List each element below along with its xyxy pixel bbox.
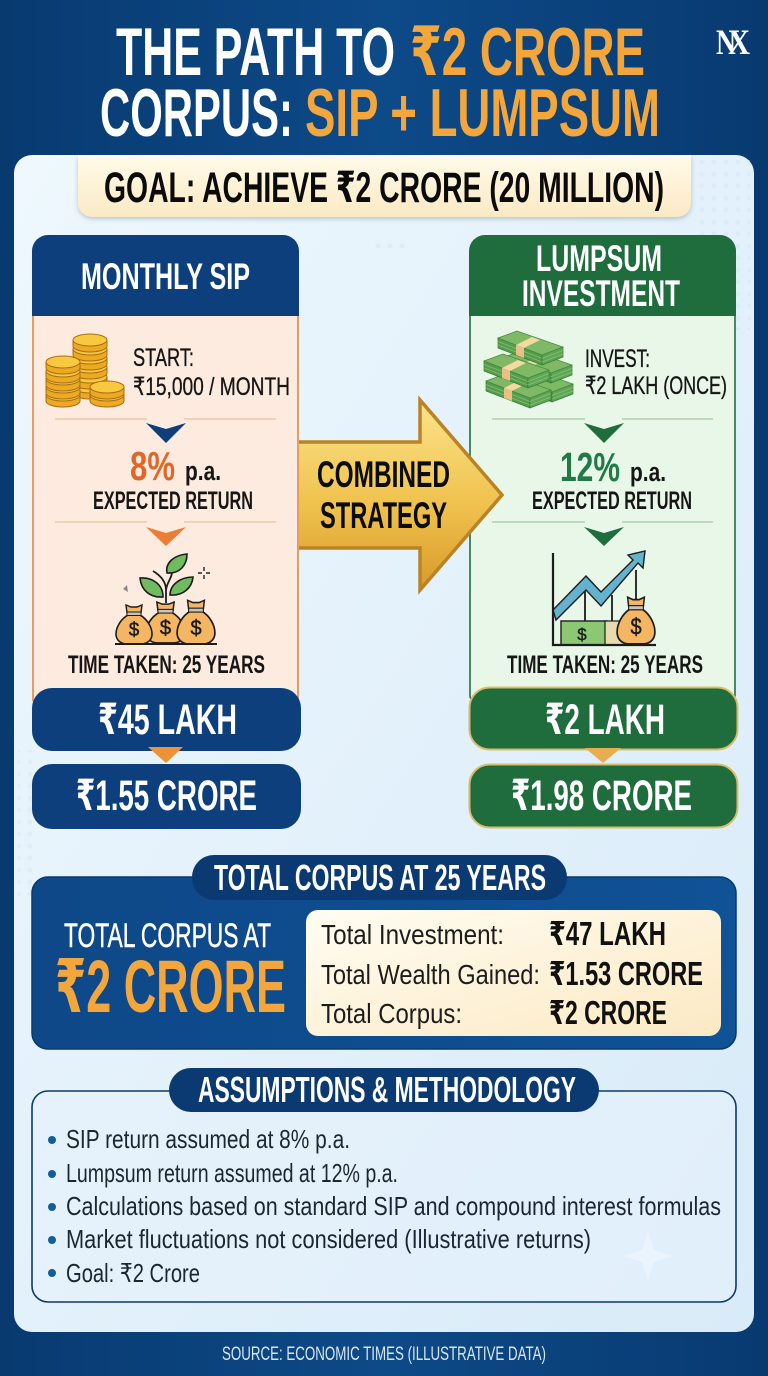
arrow: down green	[584, 423, 624, 443]
assumptions list: SIP return assumed at 8% p.a.	[66, 1124, 350, 1154]
total corpus summary table: ₹2 CRORE	[549, 994, 667, 1031]
SIP corpus pill: ₹1.55 CRORE	[76, 772, 257, 820]
lumpsum return: 12%	[560, 444, 620, 490]
lumpsum invest amount: INVEST:	[585, 345, 650, 373]
SIP time taken: TIME TAKEN: 25 YEARS	[68, 651, 265, 679]
arrow: combined strategy	[299, 400, 502, 590]
total corpus headline: ₹2 CRORE	[55, 945, 286, 1028]
title: CORPUS:	[100, 75, 293, 151]
lumpsum invested pill	[470, 688, 738, 750]
panel: assumptions and methodology	[32, 1068, 736, 1302]
SIP return: EXPECTED RETURN	[93, 487, 253, 515]
assumptions list	[48, 1124, 721, 1288]
arrow: down green 2	[584, 527, 624, 546]
total corpus heading pill: TOTAL CORPUS AT 25 YEARS	[214, 857, 546, 898]
total corpus summary table: ₹47 LAKH	[549, 915, 666, 952]
total corpus heading pill	[192, 855, 567, 900]
lumpsum card body	[470, 300, 735, 700]
arrow: down orange	[146, 527, 186, 546]
logo: X	[728, 22, 750, 62]
total corpus summary table: Total Wealth Gained:	[321, 959, 540, 990]
lumpsum return: p.a.	[630, 457, 666, 487]
SIP start amount: START:	[133, 344, 194, 372]
total corpus headline: TOTAL CORPUS AT	[64, 917, 271, 955]
assumptions list: Goal: ₹2 Crore	[66, 1258, 200, 1288]
icon: growth chart: $	[577, 625, 587, 644]
lumpsum invested pill: ₹2 LAKH	[545, 696, 665, 744]
assumptions heading pill	[169, 1068, 599, 1112]
lumpsum header: LUMPSUM	[536, 238, 662, 279]
arrow: combined strategy: COMBINED	[317, 454, 450, 495]
lumpsum header: INVESTMENT	[522, 273, 680, 314]
source line: SOURCE: ECONOMIC TIMES (ILLUSTRATIVE DATA)	[222, 1344, 546, 1365]
SIP header	[32, 235, 299, 316]
SIP return	[93, 443, 253, 515]
SIP return: p.a.	[185, 456, 221, 486]
title: ₹2 CRORE	[410, 14, 645, 90]
lumpsum invest amount	[585, 345, 727, 400]
assumptions list: Lumpsum return assumed at 12% p.a.	[66, 1158, 398, 1188]
SIP invested pill	[32, 688, 301, 751]
panel: monthly SIP	[32, 235, 301, 829]
icon: growth chart	[553, 551, 656, 645]
total corpus summary table: Total Corpus:	[321, 998, 462, 1029]
lumpsum return	[532, 444, 692, 515]
SIP invested pill: ₹45 LAKH	[98, 696, 237, 744]
SIP start amount: ₹15,000 / MONTH	[133, 373, 290, 401]
panel: total corpus	[32, 855, 736, 1049]
SIP header: MONTHLY SIP	[81, 256, 250, 297]
lumpsum header	[469, 235, 736, 316]
panel: lumpsum investment	[469, 235, 738, 828]
arrow: combined strategy: STRATEGY	[320, 495, 447, 536]
total corpus summary table: ₹1.53 CRORE	[549, 955, 703, 992]
SIP return: 8%	[130, 443, 175, 489]
goal banner	[78, 155, 691, 217]
lumpsum corpus pill	[470, 764, 738, 828]
title: THE PATH TO	[116, 14, 395, 90]
assumptions list: Market fluctuations not considered (Illustrative returns)	[66, 1224, 591, 1254]
title	[100, 14, 660, 151]
total corpus headline	[55, 917, 286, 1028]
total corpus summary table	[306, 910, 721, 1036]
arrow: SIP pill connector	[148, 747, 183, 763]
logo: N	[716, 22, 736, 62]
SIP start amount	[133, 344, 290, 401]
SIP corpus pill	[32, 764, 301, 829]
arrow: lumpsum pill connector	[585, 748, 621, 763]
icon: coin stacks	[46, 334, 124, 407]
SIP card body	[33, 300, 298, 705]
arrow: down navy	[146, 423, 186, 443]
total corpus summary table: Total Investment:	[321, 919, 504, 950]
icon: cash bundles	[484, 331, 573, 408]
icon: plant and money bags	[115, 554, 217, 644]
